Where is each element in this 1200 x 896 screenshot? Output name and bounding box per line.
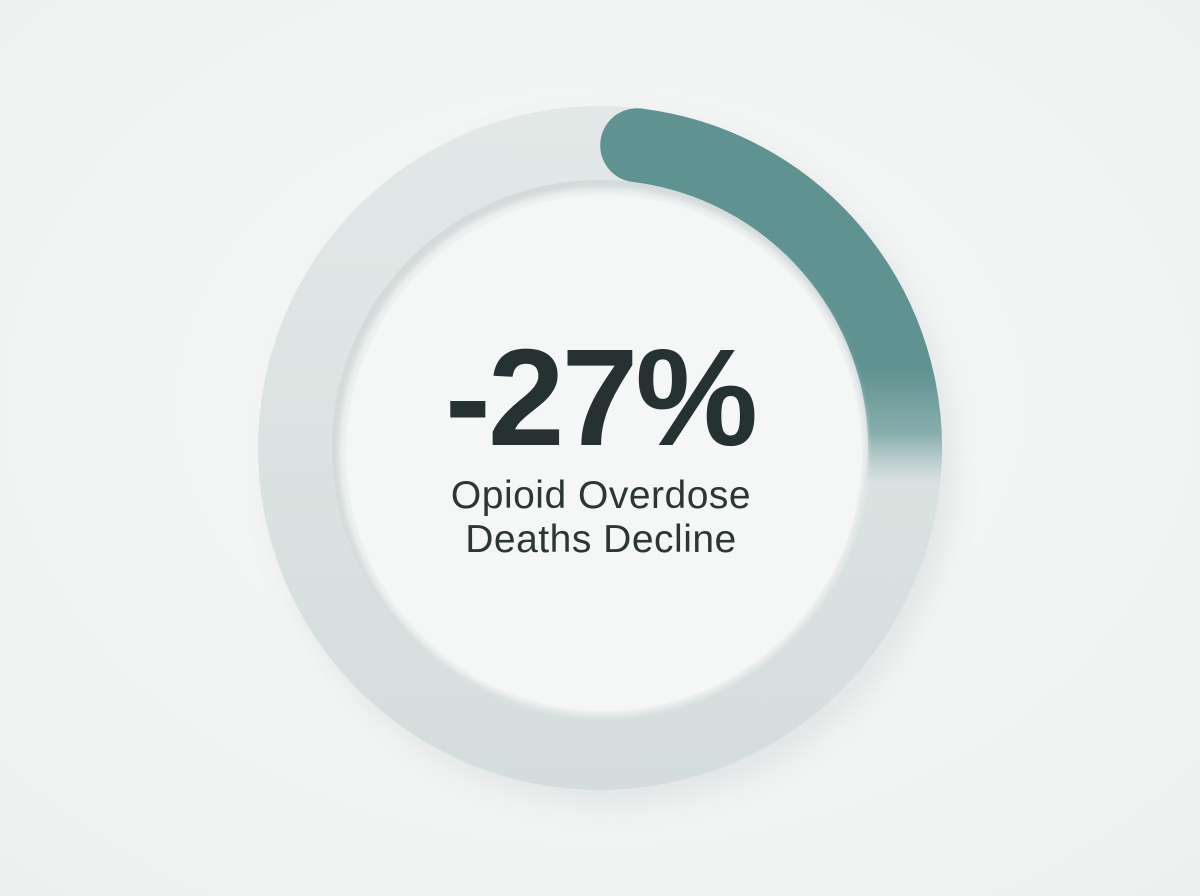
headline number: -27% [445,321,755,475]
progress arc: teal [600,108,905,501]
label [451,474,751,561]
inner disc [332,180,868,716]
label: Deaths Decline [465,518,737,561]
label: Opioid Overdose [451,474,751,517]
ring shadow [270,120,954,804]
ring track [258,106,942,790]
